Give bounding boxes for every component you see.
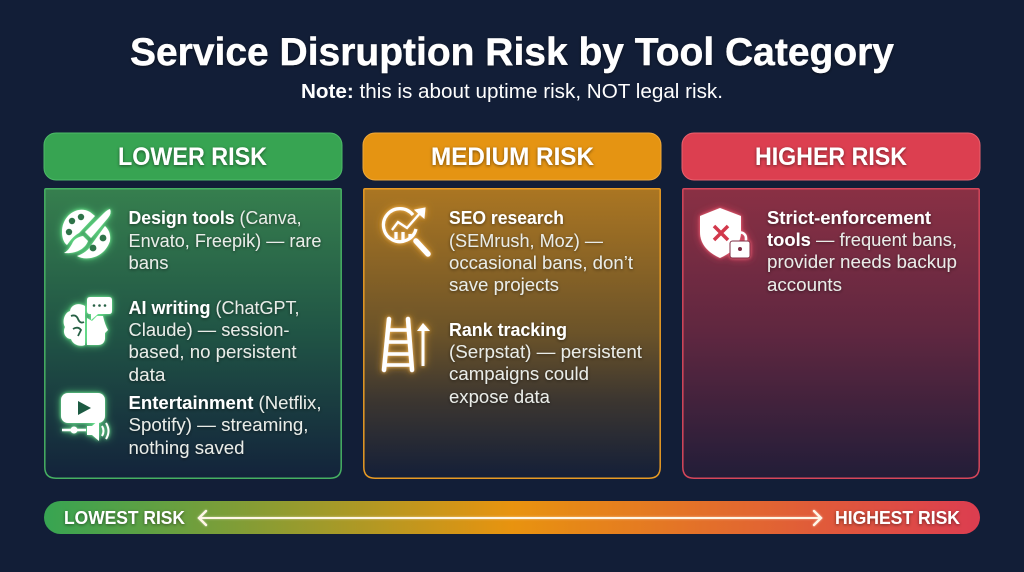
text: design tools: [128, 207, 322, 273]
panel: lower risk: [44, 133, 342, 478]
icon: shield with x and lock: [700, 208, 750, 258]
higher risk header: HIGHER RISK: [755, 143, 907, 171]
text: strict-enforcement tools: Strict-enforcement: [767, 207, 931, 228]
medium risk header: MEDIUM RISK: [431, 143, 594, 171]
text: ai writing: AI writing (ChatGPT,: [128, 297, 300, 318]
lower risk body: [45, 189, 341, 478]
text: ai writing: based, no persistent: [128, 341, 296, 362]
text: seo research: (SEMrush, Moz) —: [449, 230, 603, 251]
lowest risk label: LOWEST RISK: [64, 507, 186, 528]
text: rank tracking: expose data: [449, 386, 551, 407]
icon: ladder with up arrow: [384, 319, 430, 370]
text: seo research: occasional bans, don’t: [449, 252, 633, 273]
subtitle note: Note: this is about uptime risk, NOT legal risk.: [301, 80, 723, 103]
text: seo research: SEO research: [449, 207, 564, 228]
text: ai writing: Claude) — session-: [128, 319, 290, 340]
text: rank tracking: [449, 319, 642, 407]
highest risk label: HIGHEST RISK: [835, 507, 961, 528]
panel: medium risk: [363, 133, 661, 478]
icon: palette and brush: [62, 209, 111, 258]
medium risk body: [364, 189, 660, 478]
icon: magnifier with chart: [383, 208, 428, 254]
text: entertainment: nothing saved: [128, 437, 244, 458]
text: ai writing: data: [128, 364, 166, 385]
higher risk header: [682, 133, 980, 180]
lower risk header: LOWER RISK: [118, 143, 267, 171]
text: strict-enforcement tools: tools — frequent bans,: [767, 229, 957, 250]
double-headed arrow: [199, 511, 821, 525]
panel: higher risk: [682, 133, 980, 478]
text: strict-enforcement tools: provider needs backup: [767, 251, 957, 272]
lower risk header: [44, 133, 342, 180]
text: design tools: bans: [128, 252, 168, 273]
higher risk body: [683, 189, 979, 478]
text: rank tracking: Rank tracking: [449, 319, 567, 340]
gradient bar: [44, 501, 980, 534]
text: entertainment: [128, 392, 322, 458]
text: seo research: [449, 207, 633, 295]
text: entertainment: Spotify) — streaming,: [128, 414, 308, 435]
text: ai writing: [128, 297, 300, 385]
title: Service Disruption Risk by Tool Category: [130, 31, 894, 74]
text: entertainment: Entertainment (Netflix,: [128, 392, 322, 413]
icon: brain and speech bubble: [64, 297, 112, 346]
text: design tools: Design tools (Canva,: [128, 207, 302, 228]
text: strict-enforcement tools: [767, 207, 957, 295]
text: strict-enforcement tools: accounts: [767, 274, 842, 295]
risk spectrum bar: [44, 501, 980, 534]
text: seo research: save projects: [449, 274, 559, 295]
medium risk header: [363, 133, 661, 180]
text: rank tracking: (Serpstat) — persistent: [449, 341, 642, 362]
text: design tools: Envato, Freepik) — rare: [128, 230, 322, 251]
icon: video and speaker: [61, 393, 108, 441]
text: rank tracking: campaigns could: [449, 363, 589, 384]
